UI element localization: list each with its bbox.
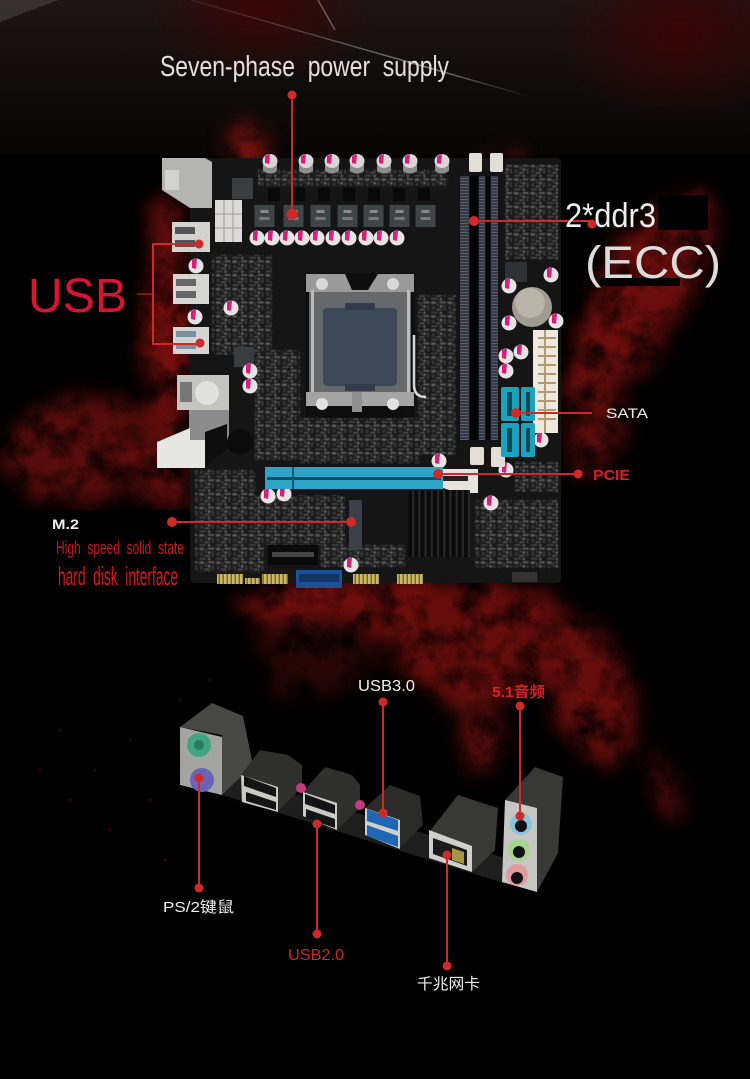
PS/2 port block [180,703,253,795]
panel: rear IO plate [180,703,563,892]
heatsink [408,490,470,557]
inductors [232,178,527,367]
8-pin power connector [215,200,242,242]
callout: SATA: SATA [606,405,649,421]
callout: PS/2: PS/2键鼠 [163,899,234,916]
SATA connectors [501,387,535,457]
base strip [222,772,505,884]
USB2.0 stack right [296,767,360,830]
M.2 slot [268,500,362,565]
callout: M.2: High speed solid state [56,538,184,558]
callout: PS/2 [163,774,234,916]
callout: 2*ddr3 ECC [469,195,721,288]
panel: motherboard [157,153,564,588]
callout: SATA [511,405,649,421]
callout: PCIE: PCIE [593,467,630,484]
mask under M.2 text [0,510,190,605]
LAN port [429,795,498,872]
callout: PCIE [433,467,630,484]
callout: seven-phase power supply: Seven-phase power supply [160,51,449,83]
pin headers [217,572,537,584]
board base [190,158,561,583]
USB header blue [296,570,342,588]
RAM slots [458,153,505,467]
callout: gigabit LAN: 千兆网卡 [417,975,480,993]
24-pin ATX connector [533,330,558,433]
silkscreen component texture [195,165,558,572]
callout: USB2.0 [288,820,344,964]
USB3.0 stack [355,785,423,849]
rear IO ports [157,158,253,468]
callout: 2*ddr3 ECC: 2*ddr3 [565,197,656,235]
leader line [286,90,298,220]
callout: USB3.0: USB3.0 [358,678,415,695]
callout: USB2.0: USB2.0 [288,947,344,964]
red smoke background [0,125,742,830]
callout: M.2: hard disk interface [58,561,178,591]
CPU socket [305,273,426,418]
voltage regulator chips [268,188,430,201]
callout: USB3.0 [358,678,415,818]
CMOS battery [512,287,552,327]
faint red specks left [38,678,212,862]
callout: 2*ddr3 ECC: (ECC) [585,237,721,288]
callout: gigabit LAN [417,850,480,993]
top band with streaks [0,0,750,155]
callout: 5.1 audio: 5.1音频 [492,683,545,701]
capacitors [188,154,564,572]
PCIe slot [265,467,478,493]
callout: USB [28,240,204,348]
callout: seven-phase power supply [160,51,449,220]
USB2.0 stack left [241,750,302,812]
callout: M.2 [52,516,356,591]
callout: USB: USB [28,270,127,323]
callout: 5.1 audio [492,683,545,820]
audio jacks block [502,767,563,892]
callout: M.2: M.2 [52,516,79,532]
